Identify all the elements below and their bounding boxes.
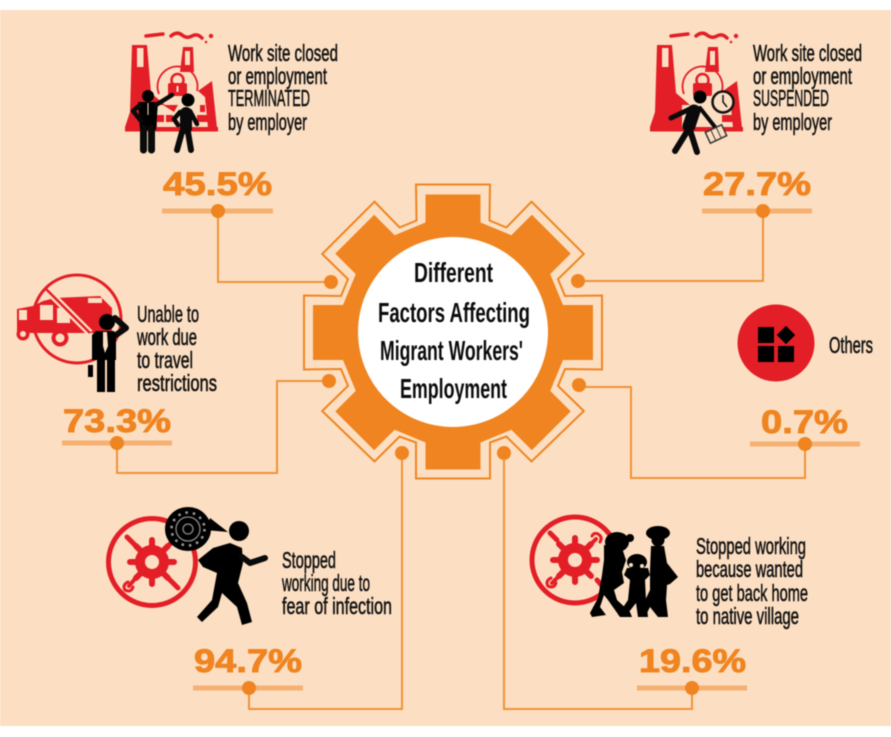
- label: terminated: [228, 40, 338, 135]
- connector: terminated 45.5%: [162, 204, 338, 289]
- connector: fear of infection 94.7%: [193, 446, 409, 709]
- value: 27.7%: 27.7%: [703, 166, 811, 202]
- label: travel restrictions: restrictions: [137, 370, 217, 396]
- title: Employment: [400, 373, 507, 404]
- connector: travel restrictions 73.3%: [62, 374, 336, 473]
- label: travel restrictions: to travel: [137, 347, 193, 373]
- icon: factory with employer terminating worker: [125, 33, 218, 150]
- walking worker figure: [671, 90, 715, 152]
- label: terminated: by employer: [228, 109, 307, 135]
- prohibition ring: [33, 275, 121, 363]
- title: Factors Affecting: [378, 297, 530, 328]
- title: [378, 257, 530, 404]
- label: terminated: Work site closed: [228, 40, 338, 66]
- connector: others 0.7%: [572, 378, 860, 478]
- label: travel restrictions: Unable to: [137, 301, 199, 327]
- bus: [16, 296, 112, 346]
- suitcase: [705, 125, 727, 143]
- icon: others: [738, 304, 814, 382]
- stop gear ring: [108, 518, 196, 606]
- icon: no bus and worried worker: [16, 275, 126, 392]
- label: fear of infection: [281, 547, 392, 619]
- value: 0.7%: 0.7%: [761, 404, 848, 440]
- title: Migrant Workers': [380, 335, 523, 366]
- label: back home: to get back home: [696, 580, 808, 606]
- gear centre circle: [358, 237, 548, 427]
- connector: suspended 27.7%: [571, 204, 812, 288]
- icon: stopped gear and runner with virus thought: [108, 507, 265, 625]
- connector: back home 19.6%: [497, 446, 747, 709]
- running person: [197, 521, 265, 625]
- label: travel restrictions: [136, 301, 217, 396]
- label: fear of infection: Stopped: [282, 547, 336, 573]
- clock: [712, 92, 734, 112]
- label: back home: [696, 533, 808, 629]
- stop gear ring: [532, 517, 618, 603]
- gear body: [313, 194, 593, 470]
- label: back home: to native village: [696, 603, 799, 629]
- value: 94.7%: 94.7%: [194, 643, 302, 679]
- label: terminated: or employment: [228, 63, 327, 89]
- label: fear of infection: fear of infection: [282, 593, 392, 619]
- value: 73.3%: 73.3%: [63, 403, 171, 439]
- label: suspended: [753, 40, 862, 135]
- employer figure: [133, 90, 172, 150]
- value: 45.5%: 45.5%: [163, 166, 272, 202]
- label: back home: because wanted: [696, 556, 803, 582]
- label: terminated: TERMINATED: [228, 85, 310, 111]
- virus speech bubble: [165, 507, 228, 551]
- gear outline: [304, 184, 602, 478]
- central gear: [304, 184, 602, 478]
- label: back home: Stopped working: [696, 533, 806, 559]
- value: 19.6%: 19.6%: [639, 643, 746, 679]
- label: travel restrictions: work due: [136, 324, 197, 350]
- label: fear of infection: working due to: [281, 570, 370, 596]
- title: Different: [414, 257, 493, 288]
- icon: factory with suspended worker: [650, 33, 743, 152]
- label: suspended: by employer: [753, 109, 832, 135]
- family silhouette: [590, 526, 678, 617]
- icon: stopped gear and family walking home: [532, 517, 678, 617]
- worker figure: [174, 94, 197, 150]
- worried man: [88, 314, 126, 392]
